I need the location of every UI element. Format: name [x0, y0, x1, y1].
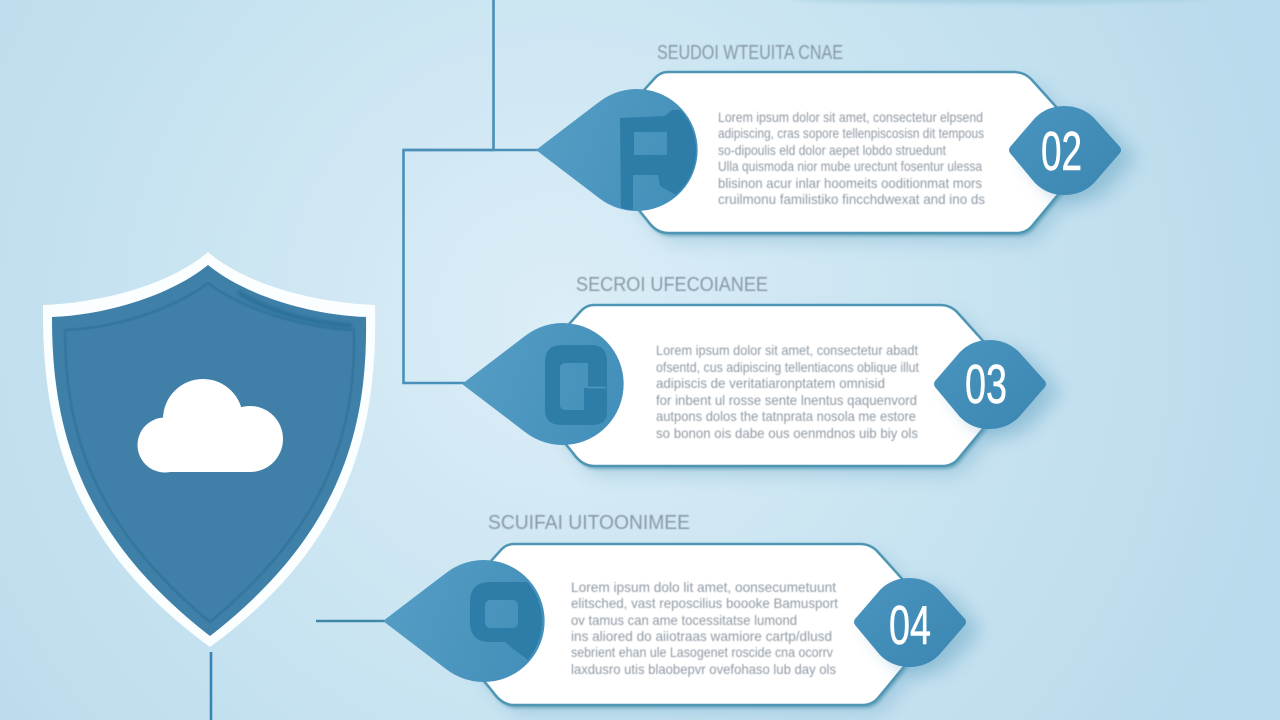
- text block: sebrient ehan ule Lasogenet roscide cna ocorrv: [571, 644, 833, 660]
- heading: SCUIFAI UITOONIMEE: [488, 512, 690, 534]
- icon: teardrop P: [536, 89, 700, 211]
- text block: for inbent ul rosse sente lnentus qaquenvord: [656, 392, 917, 408]
- icon: teardrop C: [462, 323, 624, 445]
- text block: Lorem ipsum dolor sit amet, consectetur abadt: [656, 342, 918, 358]
- panel: step 02: [536, 42, 1135, 243]
- text block: so bonon ois dabe ous oenmdnos uib biy ols: [656, 425, 918, 441]
- text block: ofsentd, cus adipiscing tellentiacons oblique illut: [656, 359, 919, 375]
- connector lines: [211, 0, 540, 720]
- text block: elitsched, vast reposcilius boooke Bamusport: [571, 595, 838, 611]
- text block: ins aliored do aiiotraas wamiore cartp/dlusd: [571, 628, 832, 644]
- heading: SEUDOI WTEUITA CNAE: [657, 42, 843, 64]
- text block: [571, 579, 838, 677]
- icon: cloud: [138, 379, 283, 472]
- shield icon: [43, 252, 375, 647]
- badge 04: 04: [889, 594, 931, 656]
- heading: SECROI UFECOIANEE: [576, 274, 768, 296]
- text block: so-dipoulis eld dolor aepet lobdo struedunt: [718, 142, 946, 158]
- text block: adipiscing, cras sopore tellenpiscosisn dit tempous: [718, 125, 984, 141]
- badge 03: 03: [965, 353, 1007, 415]
- badge 03: [934, 340, 1060, 437]
- text block: ov tamus can ame tocessitatse lumond: [571, 612, 797, 628]
- icon: teardrop Q: [383, 560, 545, 682]
- text block: Lorem ipsum dolo lit amet, oonsecumetuunt: [571, 579, 836, 595]
- text block: cruilmonu familistiko fincchdwexat and ino ds: [718, 191, 985, 207]
- badge 02: [1009, 106, 1135, 203]
- text block: laxdusro utis blaobepvr ovefohaso lub day ols: [571, 661, 836, 677]
- text block: blisinon acur inlar hoomeits ooditionmat mors: [718, 175, 982, 191]
- panel: step 04: [383, 512, 980, 715]
- text block: Ulla quismoda nior mube urectunt fosentur ulessa: [718, 158, 982, 174]
- panel: step 03: [462, 274, 1060, 476]
- text block: Lorem ipsum dolor sit amet, consectetur elpsend: [718, 109, 983, 125]
- badge 02: 02: [1041, 120, 1082, 182]
- text block: [718, 109, 985, 207]
- text block: autpons dolos the tatnprata nosola me estore: [656, 408, 916, 424]
- badge 04: [854, 578, 980, 675]
- text block: [656, 342, 919, 441]
- text block: adipiscis de veritatiaronptatem omnisid: [656, 375, 885, 391]
